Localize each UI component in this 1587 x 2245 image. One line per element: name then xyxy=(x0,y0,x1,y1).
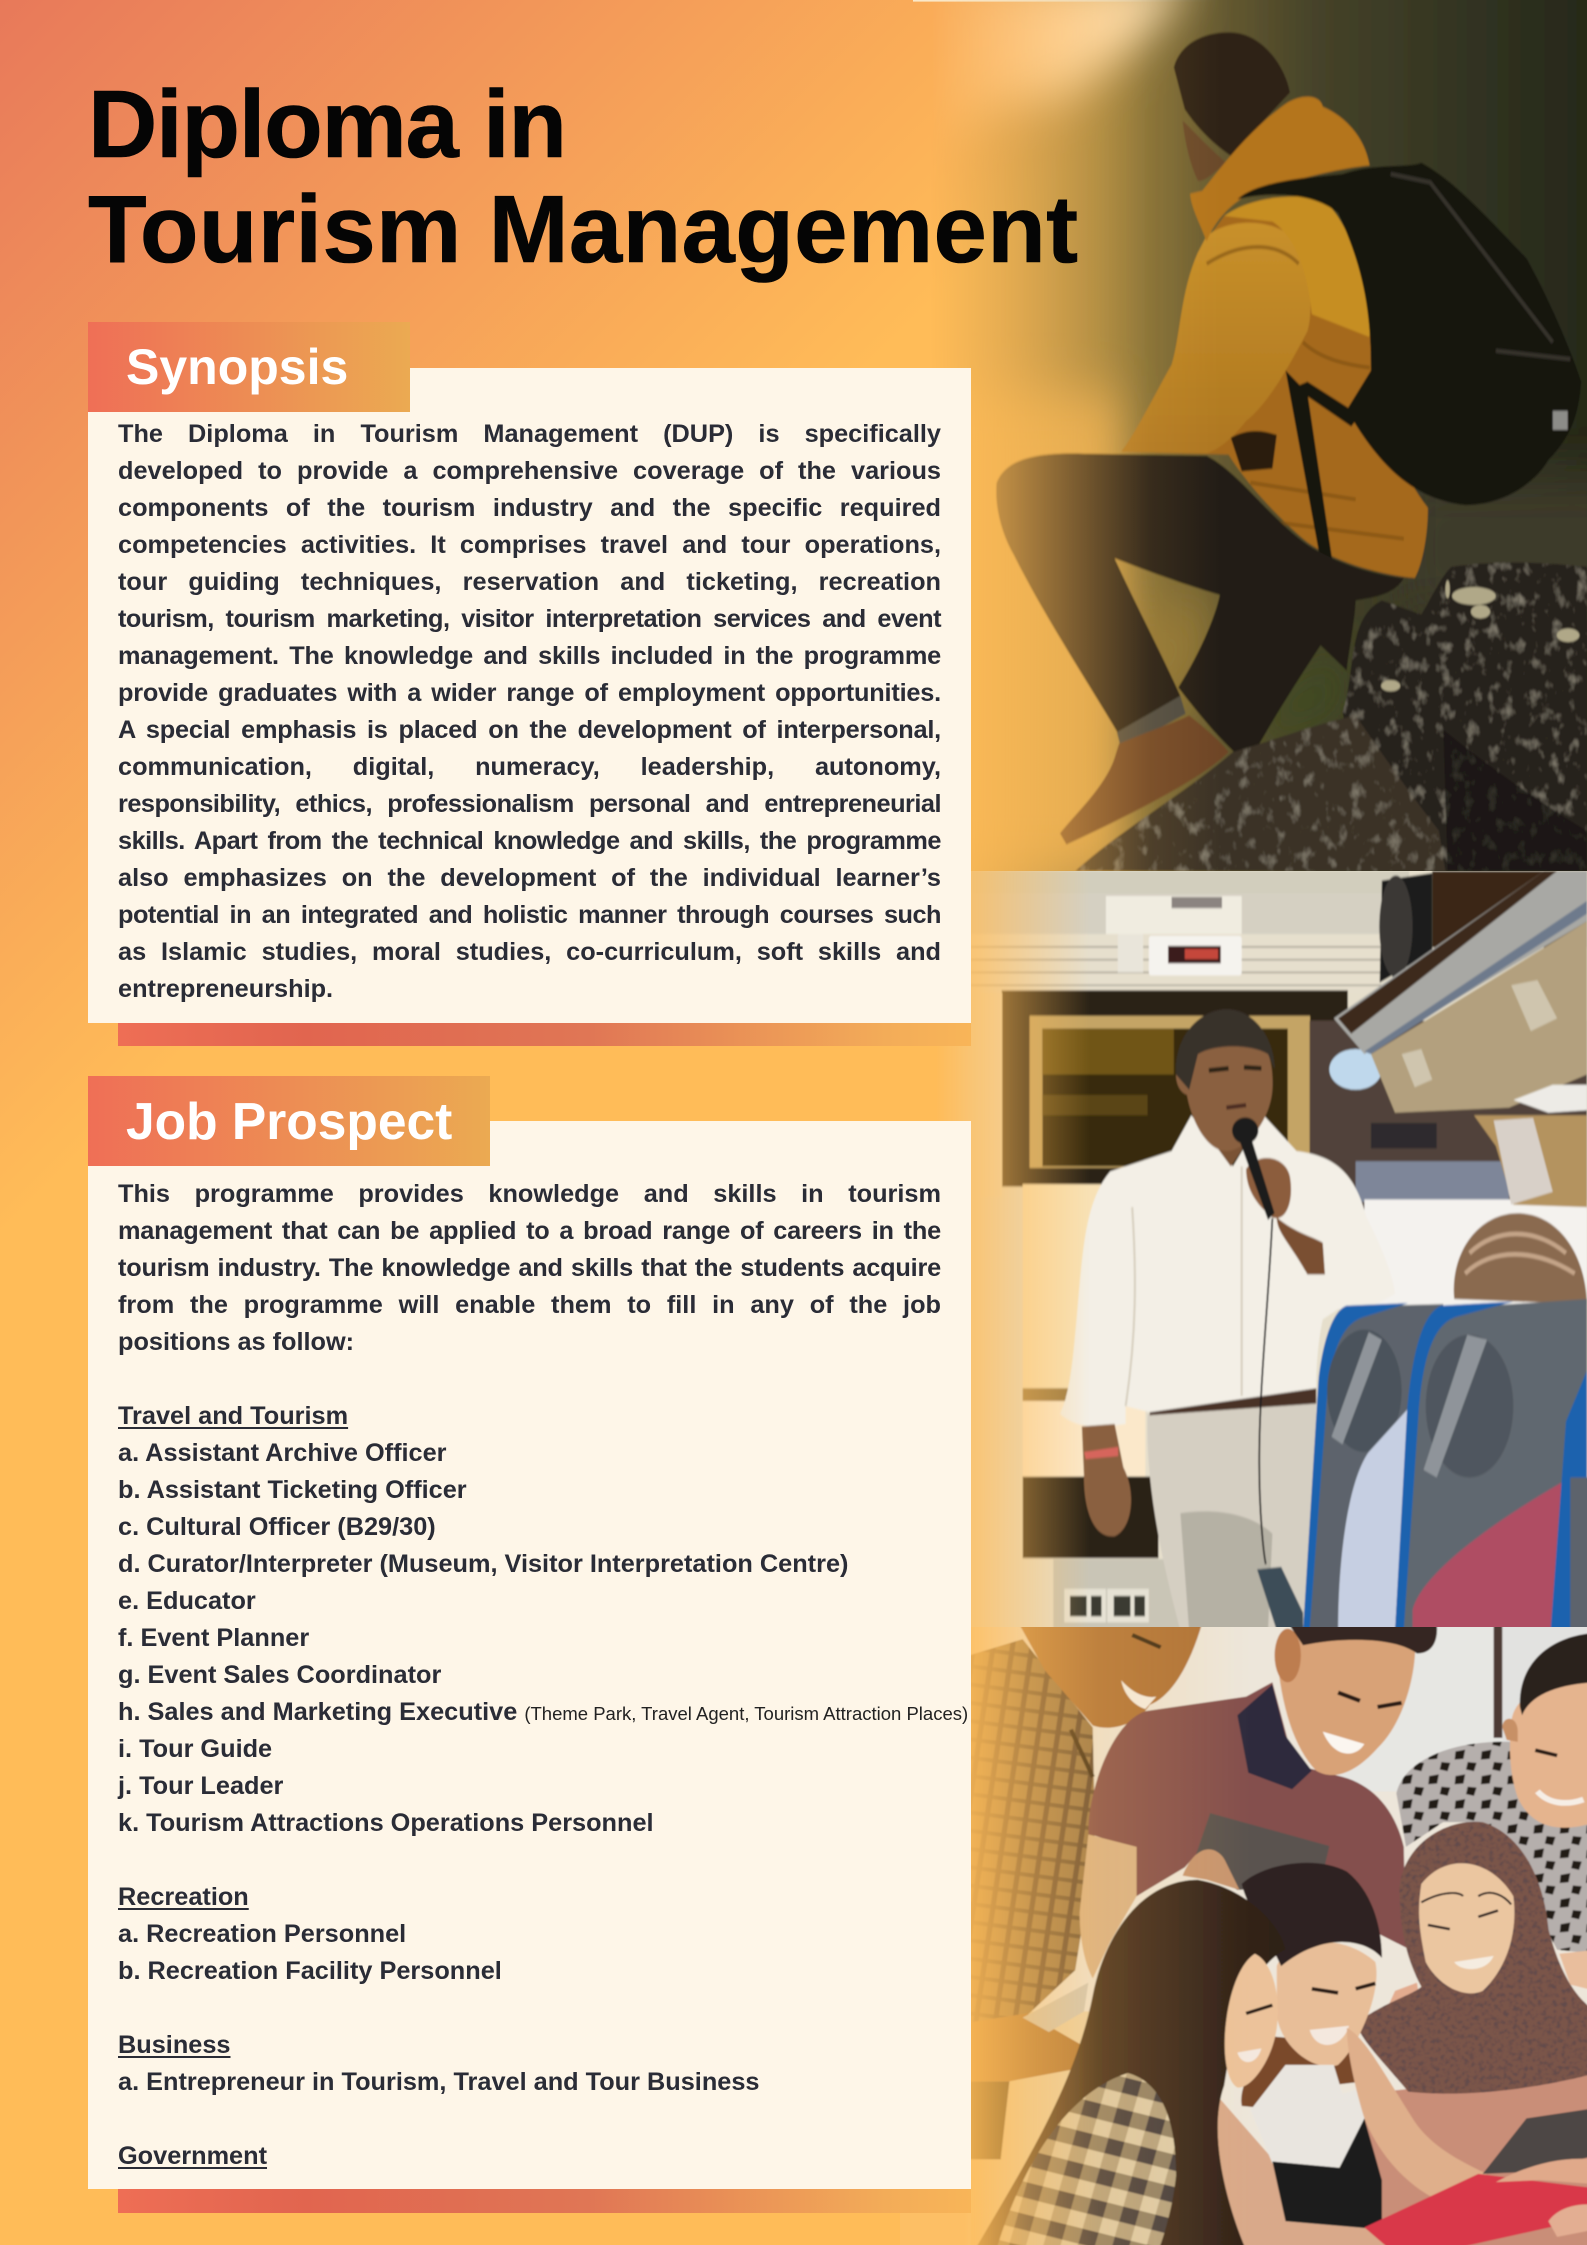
text block: synopsis body: tour guiding techniques, reservation and ticketing, recreation xyxy=(118,568,941,596)
text block: job prospect body xyxy=(118,1180,968,2170)
text block: job prospect body: This programme provides knowledge and skills in tourism xyxy=(118,1180,941,1208)
panel: job prospect xyxy=(88,1121,971,2189)
forearm, hand, microphone xyxy=(1277,1217,1325,1274)
speaker and luggage rack xyxy=(1432,871,1587,947)
hijab woman xyxy=(1356,1822,1587,2094)
trousers xyxy=(996,453,1404,755)
text block: synopsis body: competencies activities. It comprises travel and tour operations, xyxy=(118,531,941,559)
man centre, maroon polo xyxy=(1088,1682,1406,1948)
heading: synopsis xyxy=(88,322,410,412)
clock xyxy=(1149,936,1242,976)
text block: synopsis body: as Islamic studies, moral studies, co-curriculum, soft skills and xyxy=(118,938,941,966)
text block: synopsis body: potential in an integrated and holistic manner through courses such xyxy=(118,901,941,929)
man shirt xyxy=(1060,1115,1395,1427)
text block: job prospect body: g. Event Sales Coordinator xyxy=(118,1660,441,1688)
title xyxy=(88,71,1078,283)
lower left wall xyxy=(1022,1182,1102,1389)
tablet held by centre man xyxy=(1194,1813,1329,1890)
seated woman's hair xyxy=(1454,1213,1587,1304)
text block: job prospect body: Government xyxy=(118,2142,267,2170)
text block: synopsis body: responsibility, ethics, professionalism personal and entrepreneurial xyxy=(118,790,941,818)
text block: job prospect body: positions as follow: xyxy=(118,1328,354,1356)
man head xyxy=(1218,1145,1243,1168)
text block: job prospect body: Business xyxy=(118,2030,230,2058)
text block: synopsis body: also emphasizes on the development of the individual learner’s xyxy=(118,864,941,892)
text block: job prospect body: management that can be applied to a broad range of careers in the xyxy=(118,1216,941,1244)
text block: job prospect body: from the programme will enable them to fill in any of the job xyxy=(118,1290,941,1318)
text block: synopsis body: tourism, tourism marketing, visitor interpretation services and event xyxy=(118,605,941,633)
dark partition and framed picture xyxy=(1002,990,1348,1021)
synopsis accent bar xyxy=(118,1023,971,1046)
devices and red folder xyxy=(1483,2108,1587,2174)
heading: job prospect: Job Prospect xyxy=(126,1092,452,1150)
text block: synopsis body: A special emphasis is placed on the development of interpersonal, xyxy=(118,716,941,744)
text block: job prospect body: a. Recreation Personnel xyxy=(118,1920,406,1948)
text block: job prospect body: Recreation xyxy=(118,1882,249,1910)
text block: synopsis body: The Diploma in Tourism Management (DUP) is specifically xyxy=(118,420,941,448)
text block: synopsis body: components of the tourism industry and the specific required xyxy=(118,494,941,522)
backpack xyxy=(1237,163,1581,505)
wall and window right xyxy=(1310,1021,1587,1210)
boot xyxy=(1060,716,1229,845)
text block: job prospect body: h. Sales and Marketing Executive (Theme Park, Travel Agent, Tourism Attraction Places) xyxy=(118,1698,968,1726)
jacket xyxy=(1194,195,1429,580)
text block: job prospect body: d. Curator/Interpreter (Museum, Visitor Interpretation Centre) xyxy=(118,1550,848,1578)
seats xyxy=(1303,1304,1443,1631)
text block: job prospect body: k. Tourism Attractions Operations Personnel xyxy=(118,1808,654,1836)
photo: tour guide speaking on a bus xyxy=(891,865,1587,1636)
text block: synopsis body: developed to provide a comprehensive coverage of the various xyxy=(118,457,941,485)
text block: job prospect body: f. Event Planner xyxy=(118,1624,309,1652)
man trousers and belt xyxy=(1147,1398,1316,1631)
pink sweater xyxy=(1364,2069,1587,2245)
text block: synopsis body: management. The knowledge and skills included in the programme xyxy=(118,642,941,670)
job prospect accent bar xyxy=(118,2189,971,2213)
man left, plaid shirt xyxy=(961,1639,1095,2024)
text block: job prospect body: c. Cultural Officer (B29/30) xyxy=(118,1512,436,1540)
title: Tourism Management xyxy=(88,176,1078,283)
text block: job prospect body: a. Assistant Archive Officer xyxy=(118,1438,447,1466)
text block: synopsis body: entrepreneurship. xyxy=(118,975,333,1003)
girl centre xyxy=(1210,2094,1391,2245)
text block: job prospect body: Travel and Tourism xyxy=(118,1402,348,1430)
text block: synopsis body: skills. Apart from the technical knowledge and skills, the programme xyxy=(118,827,941,855)
text block: synopsis body: communication, digital, numeracy, leadership, autonomy, xyxy=(118,753,941,781)
panel: synopsis xyxy=(88,368,971,1023)
hair xyxy=(1174,32,1290,157)
photo: hiker sitting on rocks xyxy=(952,0,1587,871)
text block: job prospect body: i. Tour Guide xyxy=(118,1734,272,1762)
text block: job prospect body: a. Entrepreneur in Tourism, Travel and Tour Business xyxy=(118,2068,759,2096)
text block: synopsis body xyxy=(118,420,942,1003)
girl left xyxy=(974,1880,1286,2245)
rocks xyxy=(1342,563,1587,871)
text block: synopsis body: provide graduates with a wider range of employment opportunities. xyxy=(118,679,941,707)
text block: job prospect body: b. Recreation Facility Personnel xyxy=(118,1956,502,1984)
photo: group of smiling students xyxy=(891,1623,1587,2245)
heading: synopsis: Synopsis xyxy=(126,339,348,395)
text block: job prospect body: j. Tour Leader xyxy=(118,1772,283,1800)
title: Diploma in xyxy=(88,71,566,178)
text block: job prospect body: e. Educator xyxy=(118,1586,256,1614)
heading: job prospect xyxy=(88,1076,490,1166)
text block: job prospect body: b. Assistant Ticketing Officer xyxy=(118,1476,467,1504)
man right, leopard shirt xyxy=(1396,1742,1587,1954)
text block: job prospect body: tourism industry. The knowledge and skills that the students acquire xyxy=(118,1254,941,1282)
